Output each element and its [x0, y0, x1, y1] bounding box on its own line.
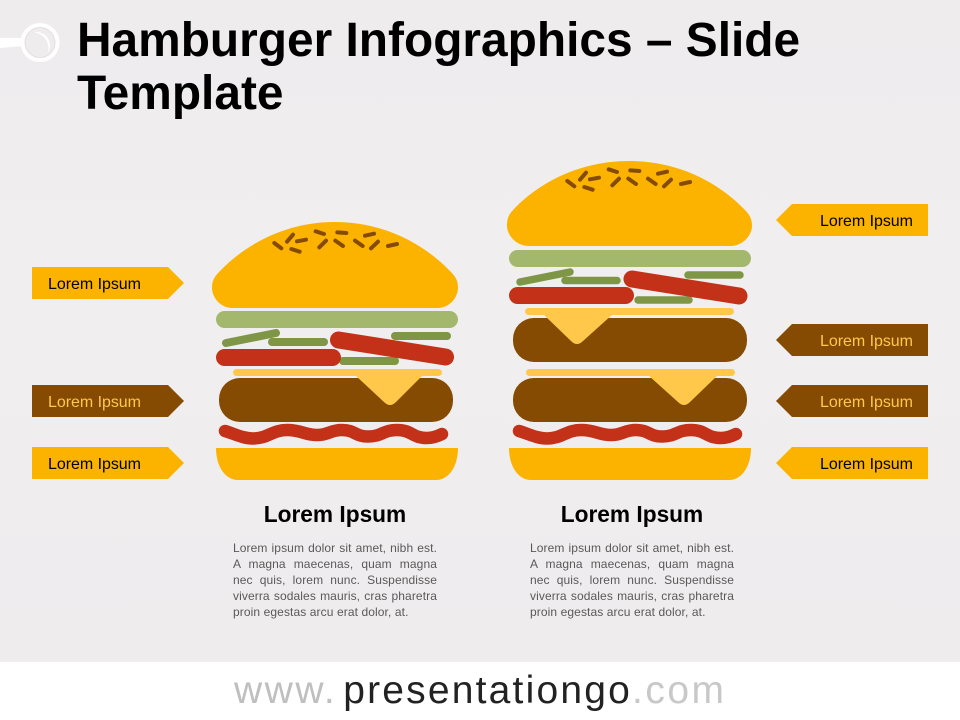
text block: left burger: proin egestas arcu erat dolor, at. — [233, 605, 409, 619]
footer: www.presentationgo.com — [234, 669, 727, 712]
bottom bun — [216, 448, 458, 480]
label: right 2 — [776, 324, 928, 356]
sesame seeds — [274, 231, 397, 252]
top bun — [212, 222, 458, 308]
burger: left — [212, 222, 458, 480]
title — [77, 14, 800, 120]
label: left 1 — [32, 267, 184, 299]
tomato — [224, 340, 446, 358]
label: right 3 — [776, 385, 928, 417]
label: right 1 — [776, 204, 928, 236]
label: right 3: Lorem Ipsum — [820, 394, 913, 411]
bacon — [225, 430, 442, 438]
patty — [219, 378, 453, 422]
label: right 2: Lorem Ipsum — [820, 333, 913, 350]
bottom bun — [509, 448, 751, 480]
upper patty — [513, 318, 747, 362]
label: left 1: Lorem Ipsum — [48, 276, 141, 293]
label: left 3 — [32, 447, 184, 479]
lower patty — [513, 378, 747, 422]
label: left 3: Lorem Ipsum — [48, 456, 141, 473]
lower cheese — [526, 369, 735, 405]
upper cheese — [525, 308, 734, 344]
bacon — [519, 430, 736, 438]
text block: left burger: A magna maecenas, quam magna — [233, 557, 437, 571]
pickles — [226, 333, 447, 361]
cheese — [233, 369, 442, 405]
label: right 4: Lorem Ipsum — [820, 456, 913, 473]
title: Template — [77, 67, 284, 120]
footer — [0, 662, 960, 720]
lettuce — [216, 311, 458, 328]
logo ring icon — [0, 23, 60, 62]
pickles — [520, 272, 740, 300]
burger: right — [507, 161, 752, 480]
text block: right burger: viverra sodales mauris, cras pharetra — [530, 589, 734, 603]
heading: left burger: Lorem Ipsum — [264, 501, 406, 527]
text block: right burger — [530, 541, 734, 619]
top bun — [507, 161, 752, 246]
text block: right burger: Lorem ipsum dolor sit amet, nibh est. — [530, 541, 734, 555]
title: Hamburger Infographics – Slide — [77, 14, 800, 67]
label: left 2: Lorem Ipsum — [48, 394, 141, 411]
text block: left burger: viverra sodales mauris, cras pharetra — [233, 589, 437, 603]
label: right 4 — [776, 447, 928, 479]
lettuce — [509, 250, 751, 267]
tomato — [518, 279, 739, 296]
label: right 1: Lorem Ipsum — [820, 213, 913, 230]
text block: right burger: A magna maecenas, quam magna — [530, 557, 734, 571]
label: left 2 — [32, 385, 184, 417]
text block: left burger — [233, 541, 437, 619]
text block: right burger: nec quis, lorem nunc. Suspendisse — [530, 573, 734, 587]
sesame seeds — [567, 169, 690, 190]
text block: left burger: nec quis, lorem nunc. Suspendisse — [233, 573, 437, 587]
text block: left burger: Lorem ipsum dolor sit amet, nibh est. — [233, 541, 437, 555]
heading: right burger: Lorem Ipsum — [561, 501, 703, 527]
text block: right burger: proin egestas arcu erat dolor, at. — [530, 605, 706, 619]
